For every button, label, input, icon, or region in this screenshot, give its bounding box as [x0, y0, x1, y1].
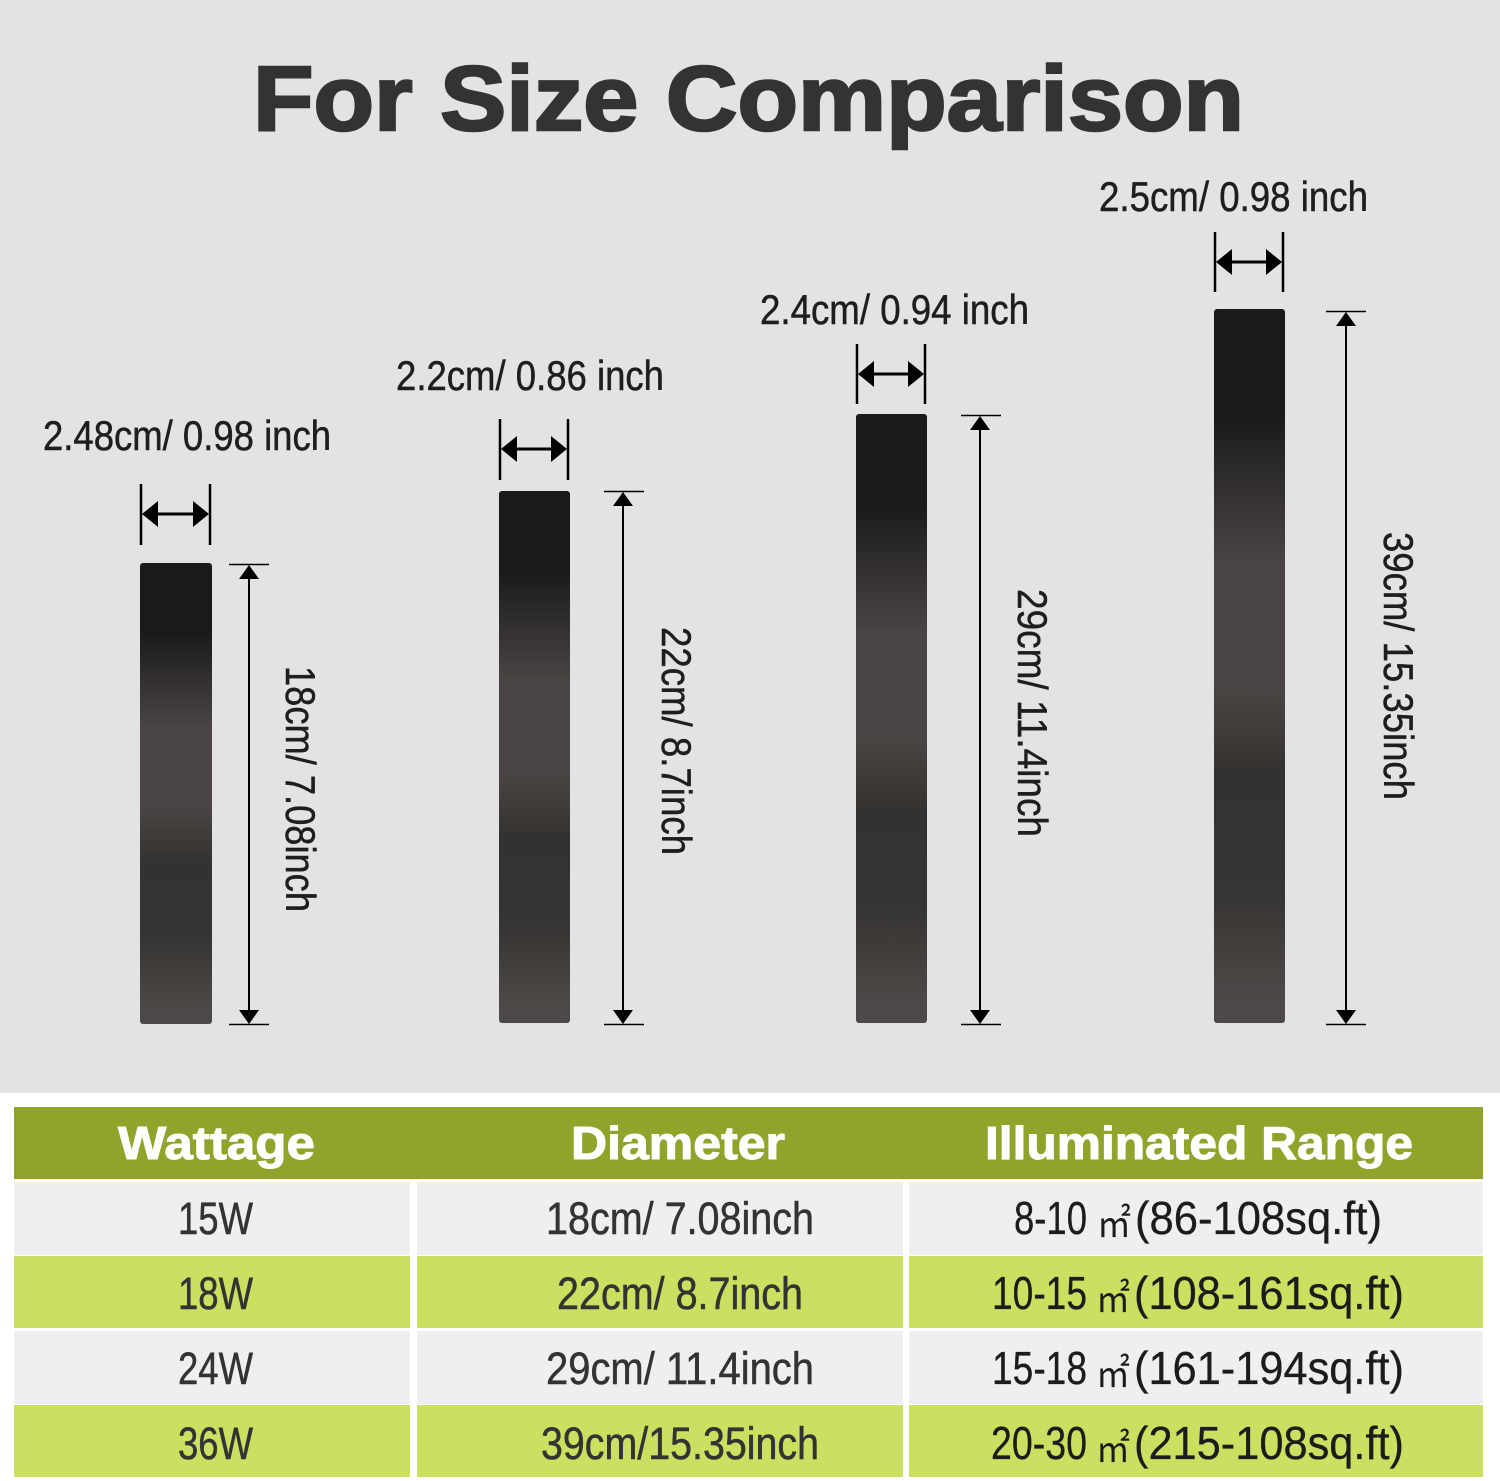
table row: 36W: 20-30: [991, 1417, 1087, 1469]
panel: size comparison background: [0, 0, 1500, 1093]
height label: 18W: 22cm/ 8.7inch: [653, 627, 700, 855]
height arrow: 24W: [961, 416, 1001, 1024]
table row: 24W: [14, 1331, 1483, 1404]
height arrow: 15W: [229, 564, 269, 1024]
panel: 15W lamp: [43, 412, 331, 1024]
height arrow: 36W: [1326, 312, 1366, 1024]
width arrow: 36W: [1215, 232, 1283, 292]
bar: 15W lamp: [140, 563, 212, 1024]
table header: [14, 1107, 1483, 1179]
width arrow: 24W: [857, 344, 925, 404]
panel: 18W lamp: [396, 352, 700, 1024]
table row: 15W: 15W: [178, 1193, 253, 1244]
table row: 18W: (108-161sq.ft): [1134, 1267, 1404, 1319]
title: For Size Comparison: [253, 48, 1244, 150]
width arrow: 15W: [141, 484, 210, 545]
table row: 36W: 39cm/15.35inch: [541, 1418, 819, 1469]
spec table: [14, 1107, 1483, 1477]
width arrow: 18W: [500, 419, 568, 480]
table row: 36W: [14, 1405, 1483, 1477]
table row: 15W: 8-10: [1014, 1192, 1087, 1244]
panel: 36W lamp: [1099, 173, 1422, 1024]
table row: 18W: [14, 1256, 1483, 1328]
width label: 36W: 2.5cm/ 0.98 inch: [1099, 173, 1368, 220]
bar: 24W lamp: [856, 414, 927, 1023]
table row: 15W: (86-108sq.ft): [1135, 1192, 1382, 1244]
table row: 18W: 22cm/ 8.7inch: [557, 1268, 803, 1319]
table header: Illuminated Range: [985, 1117, 1413, 1169]
width label: 24W: 2.4cm/ 0.94 inch: [760, 286, 1029, 333]
table row: 24W: 24W: [178, 1343, 253, 1394]
table row: 18W: ㎡: [1096, 1279, 1130, 1321]
height label: 24W: 29cm/ 11.4inch: [1009, 589, 1056, 837]
table row: 15W: 18cm/ 7.08inch: [546, 1193, 814, 1244]
table header: Diameter: [571, 1117, 785, 1169]
table row: 15W: ㎡: [1097, 1204, 1131, 1246]
table row: 15W: [14, 1182, 1483, 1255]
width label: 15W: 2.48cm/ 0.98 inch: [43, 412, 331, 459]
height label: 36W: 39cm/ 15.35inch: [1375, 532, 1422, 800]
width label: 18W: 2.2cm/ 0.86 inch: [396, 352, 664, 399]
height label: 15W: 18cm/ 7.08inch: [277, 666, 324, 912]
bar: 36W lamp: [1214, 309, 1285, 1023]
table row: 24W: (161-194sq.ft): [1134, 1342, 1404, 1394]
table row: 18W: 18W: [178, 1268, 253, 1319]
bar: 18W lamp: [499, 491, 570, 1023]
table row: 24W: 29cm/ 11.4inch: [546, 1343, 814, 1394]
height arrow: 18W: [604, 492, 644, 1024]
table row: 36W: 36W: [178, 1418, 253, 1469]
table row: 36W: ㎡: [1096, 1429, 1130, 1471]
table row: 18W: 10-15: [992, 1267, 1087, 1319]
table header: Wattage: [118, 1117, 315, 1169]
table row: 24W: 15-18: [992, 1342, 1087, 1394]
table row: 36W: (215-108sq.ft): [1134, 1417, 1404, 1469]
panel: 24W lamp: [760, 286, 1056, 1024]
table row: 24W: ㎡: [1096, 1354, 1130, 1396]
